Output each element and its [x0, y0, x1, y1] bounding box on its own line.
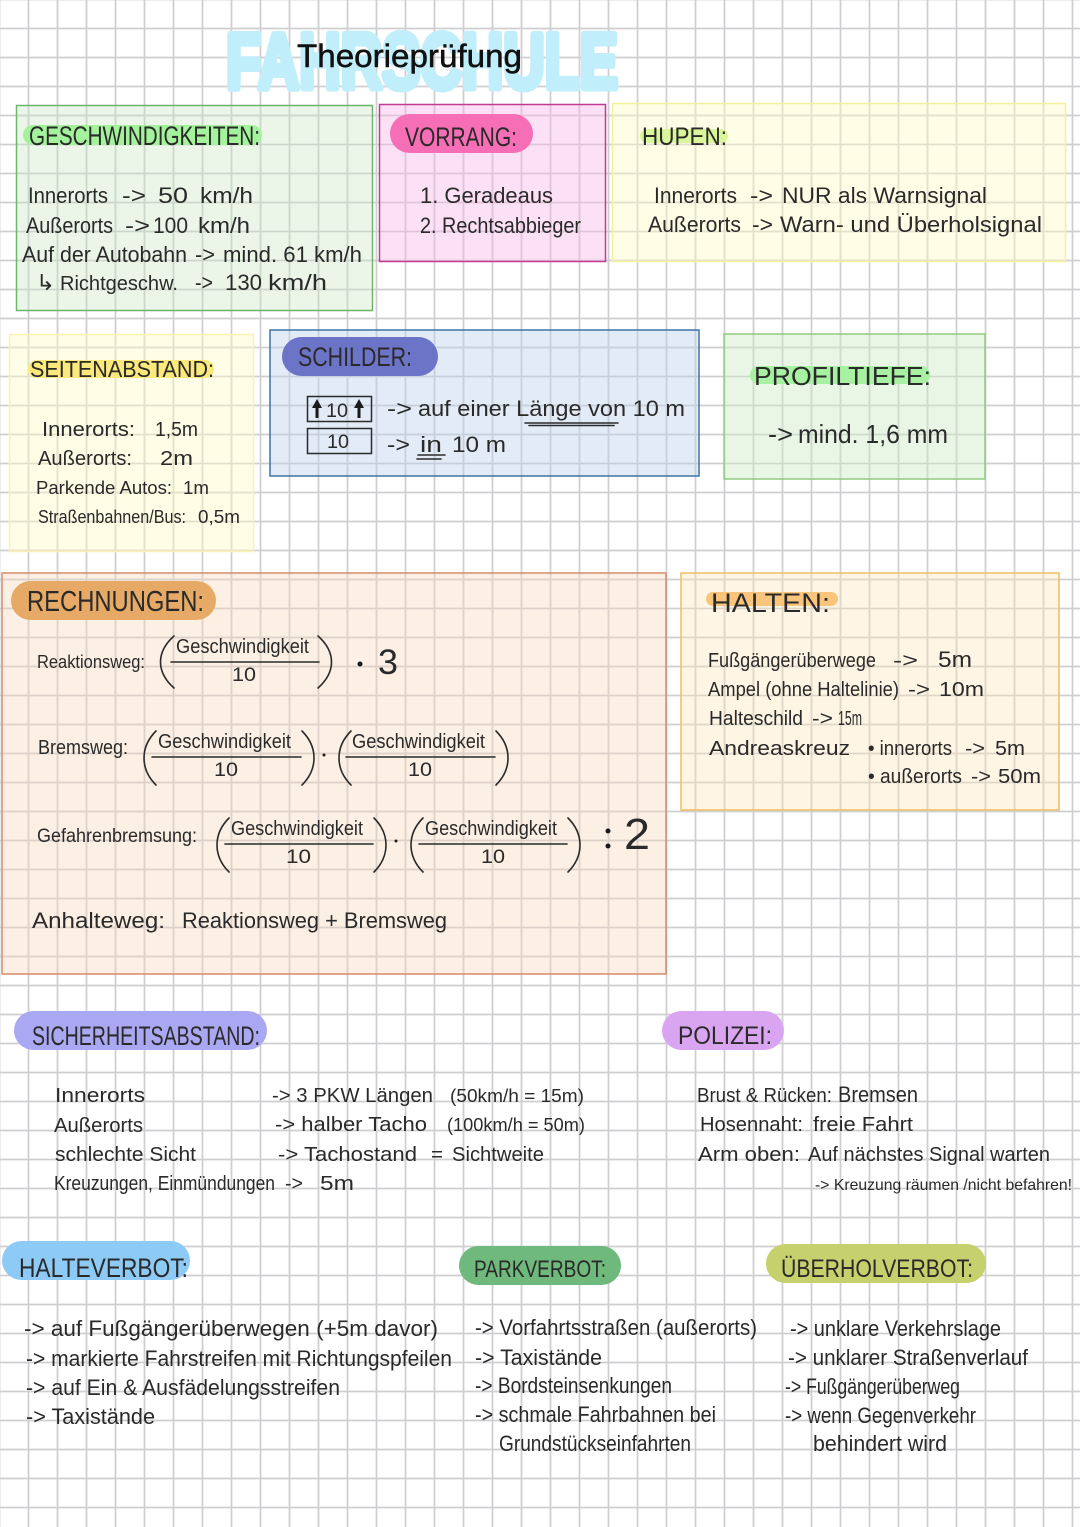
panel: Überholverbot [766, 1244, 1029, 1456]
panel: Halteverbot [2, 1241, 452, 1429]
panel: Profiltiefe [724, 334, 985, 479]
text block: limits: Auf der Autobahn [22, 242, 187, 267]
text block: sign distance: 10 m [452, 432, 506, 457]
title: foreground word: Theorieprüfung [297, 38, 522, 74]
text block: sign length: -> [387, 396, 412, 421]
panel: Parkverbot [459, 1246, 757, 1456]
text block: no parking: -> Taxistände [475, 1345, 602, 1370]
text block: no overtaking: -> Fußgängerüberweg [785, 1374, 960, 1399]
text block: limits: Richtgeschw. [60, 273, 178, 295]
text block: horn: -> [750, 183, 773, 208]
text block: horn: NUR als Warnsignal [782, 183, 987, 208]
panel: Sicherheitsabstand [14, 1011, 585, 1195]
formula: Bremsweg: Geschwindigkeit [352, 731, 485, 753]
heading: RECHNUNGEN: [27, 586, 204, 618]
text block: stopping: -> [893, 650, 918, 672]
heading: HALTEN: [711, 588, 830, 618]
text block: priority: 2. Rechtsabbieger [420, 213, 581, 238]
text block: signals: -> Kreuzung räumen /nicht befahren! [815, 1177, 1072, 1194]
text block: signals: Auf nächstes Signal warten [808, 1144, 1050, 1166]
text block: no overtaking [785, 1316, 1029, 1456]
text block: limits: ↳ [36, 270, 55, 295]
text block: stopping: Ampel (ohne Haltelinie) [708, 679, 899, 701]
text block: stopping: -> [812, 708, 833, 730]
text block: stopping: -> [908, 679, 930, 701]
text block: stopping: 5m [995, 738, 1025, 760]
text block: distances: 1,5m [155, 419, 198, 441]
text block: stopping [708, 647, 1041, 788]
heading: PROFILTIEFE: [754, 361, 931, 391]
text block: no stopping: -> markierte Fahrstreifen mit Richtungspfeilen [26, 1346, 452, 1371]
text block: distances: -> halber Tacho [275, 1114, 427, 1136]
heading: ÜBERHOLVERBOT: [781, 1255, 973, 1283]
formula: Reaktionsweg: 3 [378, 643, 398, 682]
text block: signals: Hosennaht: [700, 1114, 803, 1136]
text block: limits: km/h [268, 270, 327, 295]
text block: no stopping: -> auf Fußgängerüberwegen (+5m davor) [24, 1316, 438, 1341]
text block: signals: Arm oben: [698, 1144, 800, 1166]
text block: no parking: -> Bordsteinsenkungen [475, 1373, 672, 1398]
formula: Gefahrenbremsung: Gefahrenbremsung: [37, 826, 197, 847]
panel: Geschwindigkeiten [16, 106, 372, 310]
text block: signals: Bremsen [838, 1082, 918, 1107]
text block: no overtaking: -> unklarer Straßenverlauf [788, 1345, 1029, 1370]
panel: Seitenabstand [10, 334, 254, 552]
text block: cases: Außerorts [54, 1115, 143, 1137]
formula: Reaktionsweg: Reaktionsweg: [37, 652, 145, 672]
text block: no overtaking: -> wenn Gegenverkehr [785, 1403, 976, 1428]
text block: stopping: 5m [938, 647, 972, 672]
text block: sign length: auf einer Länge von 10 m [418, 396, 685, 421]
text block: no overtaking: behindert wird [813, 1431, 947, 1456]
text block: limits: mind. 61 km/h [223, 242, 362, 267]
text block: distances: Sichtweite [452, 1144, 544, 1166]
heading: HUPEN: [642, 123, 727, 151]
formula: Gefahrenbremsung: 10 [481, 847, 505, 868]
text block: distances: -> 3 PKW Längen [272, 1085, 433, 1107]
text block: distances: 2m [160, 448, 193, 470]
panel: Schilder [270, 330, 699, 476]
formula: Bremsweg: Geschwindigkeit [158, 731, 291, 753]
text block: cases: schlechte Sicht [55, 1144, 196, 1166]
text block: limits: Innerorts [28, 183, 108, 208]
text block: horn: Warn- und Überholsignal [780, 212, 1042, 237]
formula: Bremsweg [38, 731, 508, 785]
text block: no stopping [24, 1316, 452, 1429]
text block: no overtaking: -> unklare Verkehrslage [790, 1316, 1001, 1341]
formula: Reaktionsweg [37, 636, 398, 688]
panel: Hupen [612, 104, 1066, 262]
text block: distances: Straßenbahnen/Bus: [38, 507, 186, 527]
text block: distances: Außerorts: [38, 448, 132, 470]
text block: no parking: -> Vorfahrtsstraßen (außerorts) [475, 1315, 757, 1340]
text block: distances: 0,5m [198, 507, 240, 527]
formula: Gefahrenbremsung: 2 [624, 810, 650, 859]
text block: limits: Außerorts [26, 213, 113, 238]
title [226, 17, 618, 105]
icon: sign with arrows [308, 396, 372, 422]
text block: cases: Innerorts [55, 1085, 145, 1107]
text block: priority: 1. Geradeaus [420, 183, 553, 208]
text block: distances: = [431, 1144, 443, 1166]
icon: sign plain: 10 [327, 432, 349, 453]
text block: signals: Brust & Rücken: [697, 1085, 832, 1107]
formula: Gefahrenbremsung: 10 [286, 847, 311, 868]
text block: horn [648, 183, 1042, 237]
text block: distances: (100km/h = 50m) [447, 1115, 585, 1135]
heading: GESCHWINDIGKEITEN: [29, 121, 260, 151]
formula: Bremsweg: 10 [408, 760, 432, 781]
heading: PARKVERBOT: [474, 1256, 606, 1283]
text block: stopping: • außerorts [868, 766, 962, 788]
title: background word: FAHRSCHULE [226, 17, 618, 105]
text block: distances: Parkende Autos: [36, 478, 172, 498]
text block: stopping: 15m [838, 708, 862, 730]
panel: Rechnungen [2, 573, 666, 974]
text block: horn: Außerorts [648, 212, 741, 237]
text block: distances: Innerorts: [42, 419, 135, 441]
formula: Reaktionsweg: 10 [232, 665, 256, 686]
text block: limits: -> [125, 213, 150, 238]
formula: Gefahrenbremsung: Geschwindigkeit [425, 818, 557, 840]
text block: cases [54, 1085, 275, 1195]
text block: stopping: • innerorts [868, 738, 952, 760]
text block: stopping: Halteschild [709, 708, 803, 730]
text block: distances: -> [285, 1173, 303, 1195]
text block: sign distance: -> [387, 432, 410, 457]
text block: limits: -> [122, 183, 146, 208]
formula: Anhalteweg [32, 908, 447, 933]
text block: signals [697, 1082, 1072, 1194]
text block: stopping: -> [965, 738, 985, 760]
text block: limits: 100 [153, 213, 188, 238]
formula: Gefahrenbremsung: Geschwindigkeit [231, 818, 363, 840]
formula: Gefahrenbremsung [37, 810, 650, 872]
heading: SEITENABSTAND: [30, 356, 214, 382]
text block: stopping: 10m [939, 679, 984, 701]
text block: distances [36, 419, 240, 527]
text block: distances: (50km/h = 15m) [450, 1086, 584, 1106]
text block: horn: Innerorts [654, 183, 737, 208]
icon: sign plain [308, 428, 372, 454]
heading: SCHILDER: [298, 342, 412, 372]
heading: VORRANG: [405, 122, 517, 152]
icon: sign with arrows: 10 [326, 401, 348, 422]
text block: no stopping: -> auf Ein & Ausfädelungsstreifen [26, 1375, 340, 1400]
text block: limits: km/h [200, 183, 253, 208]
panel: Polizei [662, 1011, 1072, 1194]
text block: no parking: -> schmale Fahrbahnen bei [475, 1402, 716, 1427]
text block: limits: -> [195, 270, 213, 295]
panel: Halten [681, 573, 1059, 810]
text block: sign distance: in [420, 432, 442, 457]
text block: distances: 1m [183, 478, 209, 498]
text block: priority [420, 183, 581, 238]
text block: stopping: 50m [998, 766, 1041, 788]
text block: stopping: -> [971, 766, 991, 788]
panel: Vorrang [380, 104, 606, 262]
text block: distances: 5m [320, 1173, 354, 1195]
formula: Bremsweg: Bremsweg: [38, 737, 128, 759]
formula: Anhalteweg: Anhalteweg: [32, 908, 165, 933]
text block: distances [272, 1085, 585, 1195]
text block: distances: -> Tachostand [278, 1144, 417, 1166]
formula: Bremsweg: 10 [214, 760, 238, 781]
heading: POLIZEI: [678, 1022, 772, 1050]
text block: depth: -> [768, 419, 793, 449]
formula: Reaktionsweg: Geschwindigkeit [176, 636, 309, 658]
text block: limits [22, 183, 362, 295]
text block: limits: 50 [158, 183, 188, 208]
formula: Anhalteweg: Reaktionsweg + Bremsweg [182, 908, 447, 933]
text block: signals: freie Fahrt [813, 1114, 913, 1136]
text block: no parking [475, 1315, 757, 1456]
text block: limits: -> [195, 242, 215, 267]
text block: limits: km/h [198, 213, 250, 238]
text block: horn: -> [752, 212, 773, 237]
heading: HALTEVERBOT: [19, 1253, 188, 1283]
text block: no parking: Grundstückseinfahrten [499, 1431, 691, 1456]
text block: no stopping: -> Taxistände [26, 1404, 155, 1429]
text block: depth: mind. 1,6 mm [798, 419, 948, 449]
text block: cases: Kreuzungen, Einmündungen [54, 1173, 275, 1195]
text block: stopping: Fußgängerüberwege [708, 650, 876, 672]
text block: stopping: Andreaskreuz [709, 738, 850, 760]
text block: sign distance [387, 432, 506, 459]
text block: limits: 130 [225, 270, 262, 295]
heading: SICHERHEITSABSTAND: [32, 1021, 260, 1051]
